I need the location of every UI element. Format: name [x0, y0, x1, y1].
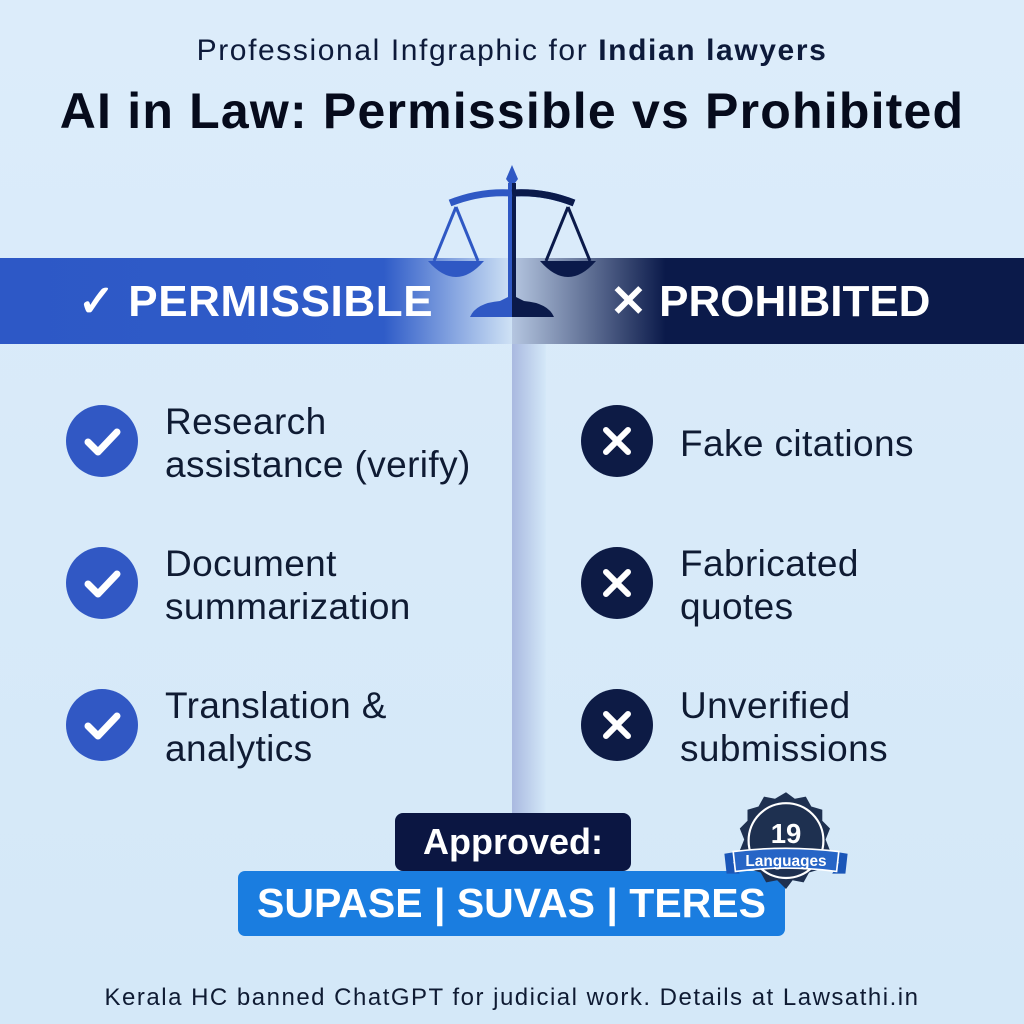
permissible list: summarization: [165, 586, 411, 627]
title: AI in Law: Permissible vs Prohibited: [60, 83, 964, 139]
item: fake citations: [581, 405, 914, 477]
prohibited list: [581, 405, 914, 769]
permissible list: analytics: [165, 728, 313, 769]
item: research: [66, 401, 471, 485]
header: prohibited: ✕ PROHIBITED: [610, 277, 930, 326]
approved label: Approved:: [423, 821, 603, 862]
prohibited list: submissions: [680, 728, 888, 769]
permissible list: assistance (verify): [165, 444, 471, 485]
permissible list: Document: [165, 543, 337, 584]
icon: scales: [428, 165, 596, 317]
header bar: [0, 258, 1024, 344]
header: permissible: [0, 258, 512, 344]
center divider: [512, 344, 546, 814]
approved tools box: [238, 871, 785, 936]
prohibited list: quotes: [680, 586, 794, 627]
item: summarization: [66, 543, 411, 627]
item: fabricated quotes: [581, 543, 859, 627]
prohibited list: Fake citations: [680, 423, 914, 464]
badge: 19 languages: [724, 792, 848, 889]
badge: 19 languages: 19: [771, 818, 801, 849]
prohibited list: Unverified: [680, 685, 851, 726]
badge: 19 languages: Languages: [745, 853, 827, 870]
approved label: [395, 813, 631, 871]
item: translation: [66, 685, 387, 769]
permissible list: Research: [165, 401, 327, 442]
item: unverified: [581, 685, 888, 769]
header: permissible: ✓ PERMISSIBLE: [78, 277, 433, 326]
permissible list: [66, 401, 471, 769]
approved tools box: SUPASE | SUVAS | TERES: [257, 880, 766, 926]
footer: Kerala HC banned ChatGPT for judicial work. Details at Lawsathi.in: [105, 984, 919, 1011]
permissible list: Translation &: [165, 685, 387, 726]
subtitle: Professional Infgraphic for Indian lawyers: [197, 34, 827, 67]
header: prohibited: [512, 258, 1024, 344]
prohibited list: Fabricated: [680, 543, 859, 584]
